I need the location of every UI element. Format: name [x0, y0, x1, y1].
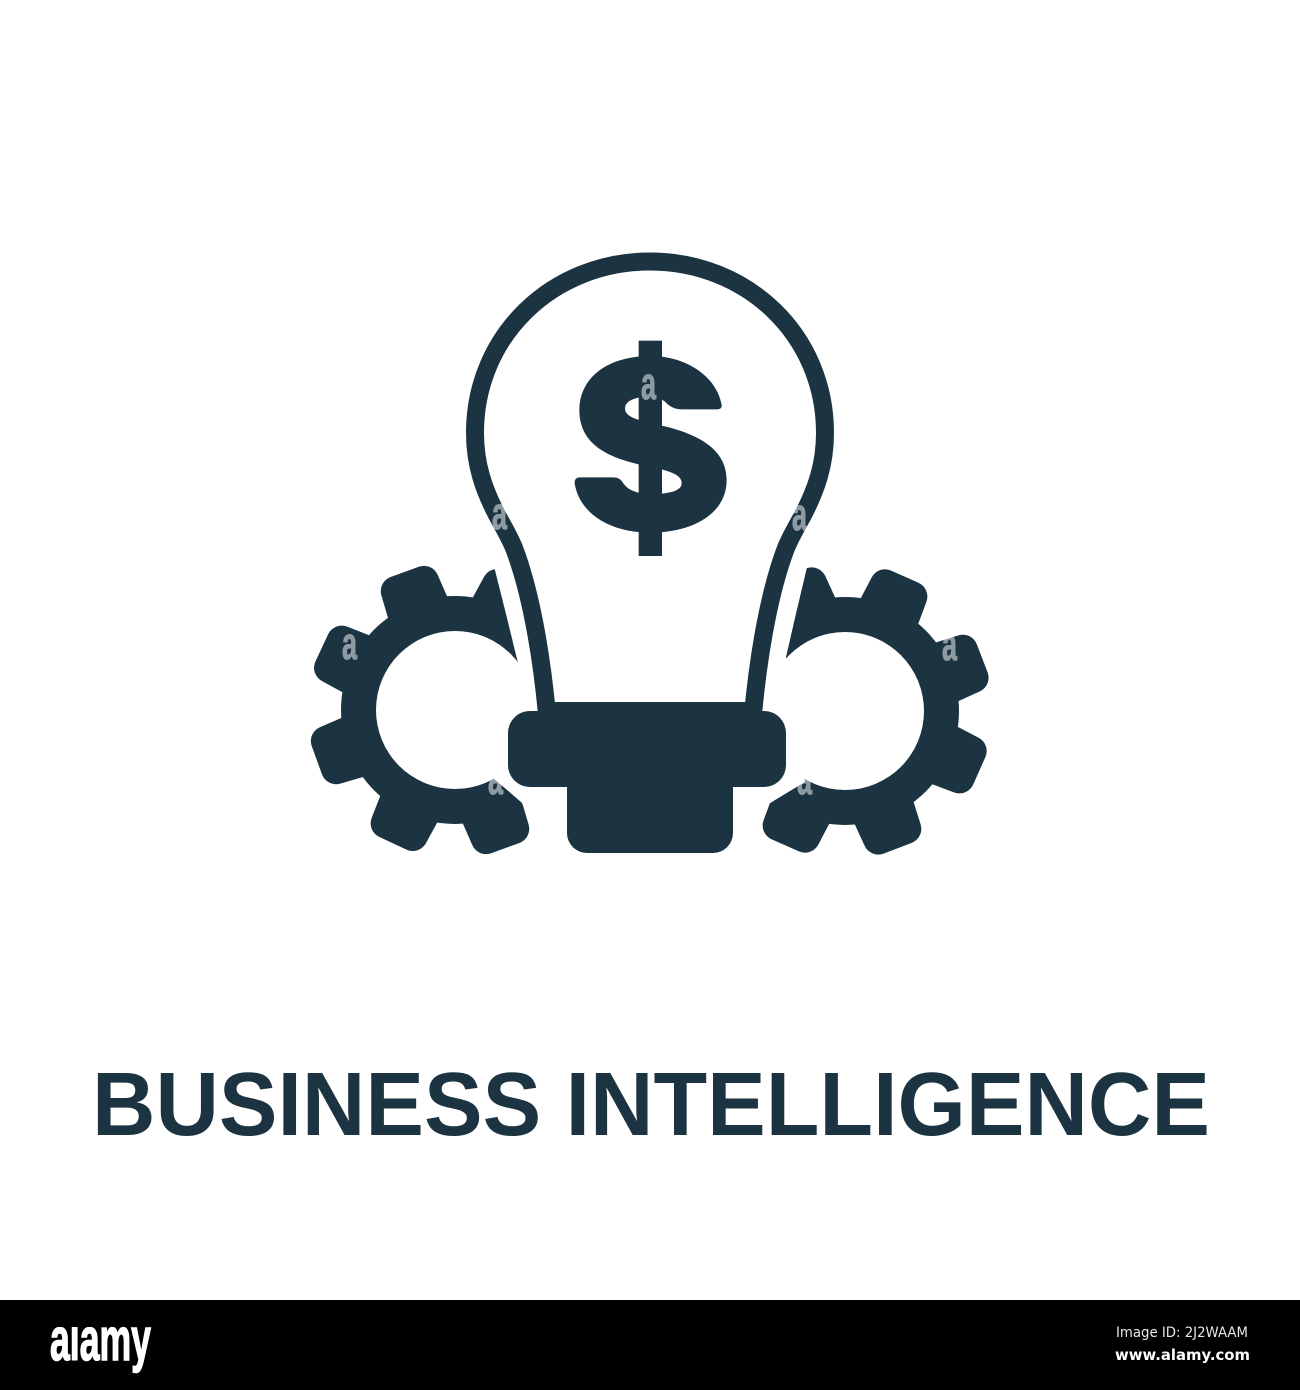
watermark letters: a: [342, 618, 358, 669]
watermark letters: a: [942, 619, 958, 670]
watermark letters: a: [792, 489, 808, 540]
icon: left gear: [325, 580, 585, 840]
footer url: www.alamy.com: [1115, 1346, 1250, 1364]
footer image id: Image ID: 2J2WAAM: [1116, 1325, 1248, 1341]
icon: dollar sign: [575, 341, 727, 556]
title: BUSINESS INTELLIGENCE: [92, 1055, 1210, 1155]
watermark letters: [342, 358, 958, 804]
icon: lightbulb screw cap: [567, 780, 733, 853]
icon: lightbulb outline: [475, 262, 825, 714]
icon: lightbulb base collar: [508, 702, 786, 787]
watermark letters: a: [492, 488, 508, 539]
watermark letters: a: [797, 753, 813, 804]
icon: business intelligence lightbulb with gears: [325, 262, 974, 853]
footer logo: alamy: [50, 1306, 151, 1373]
watermark letters: a: [488, 753, 504, 804]
watermark letters: a: [641, 358, 657, 409]
icon: right gear: [716, 582, 974, 840]
footer bar: [0, 1300, 1300, 1390]
